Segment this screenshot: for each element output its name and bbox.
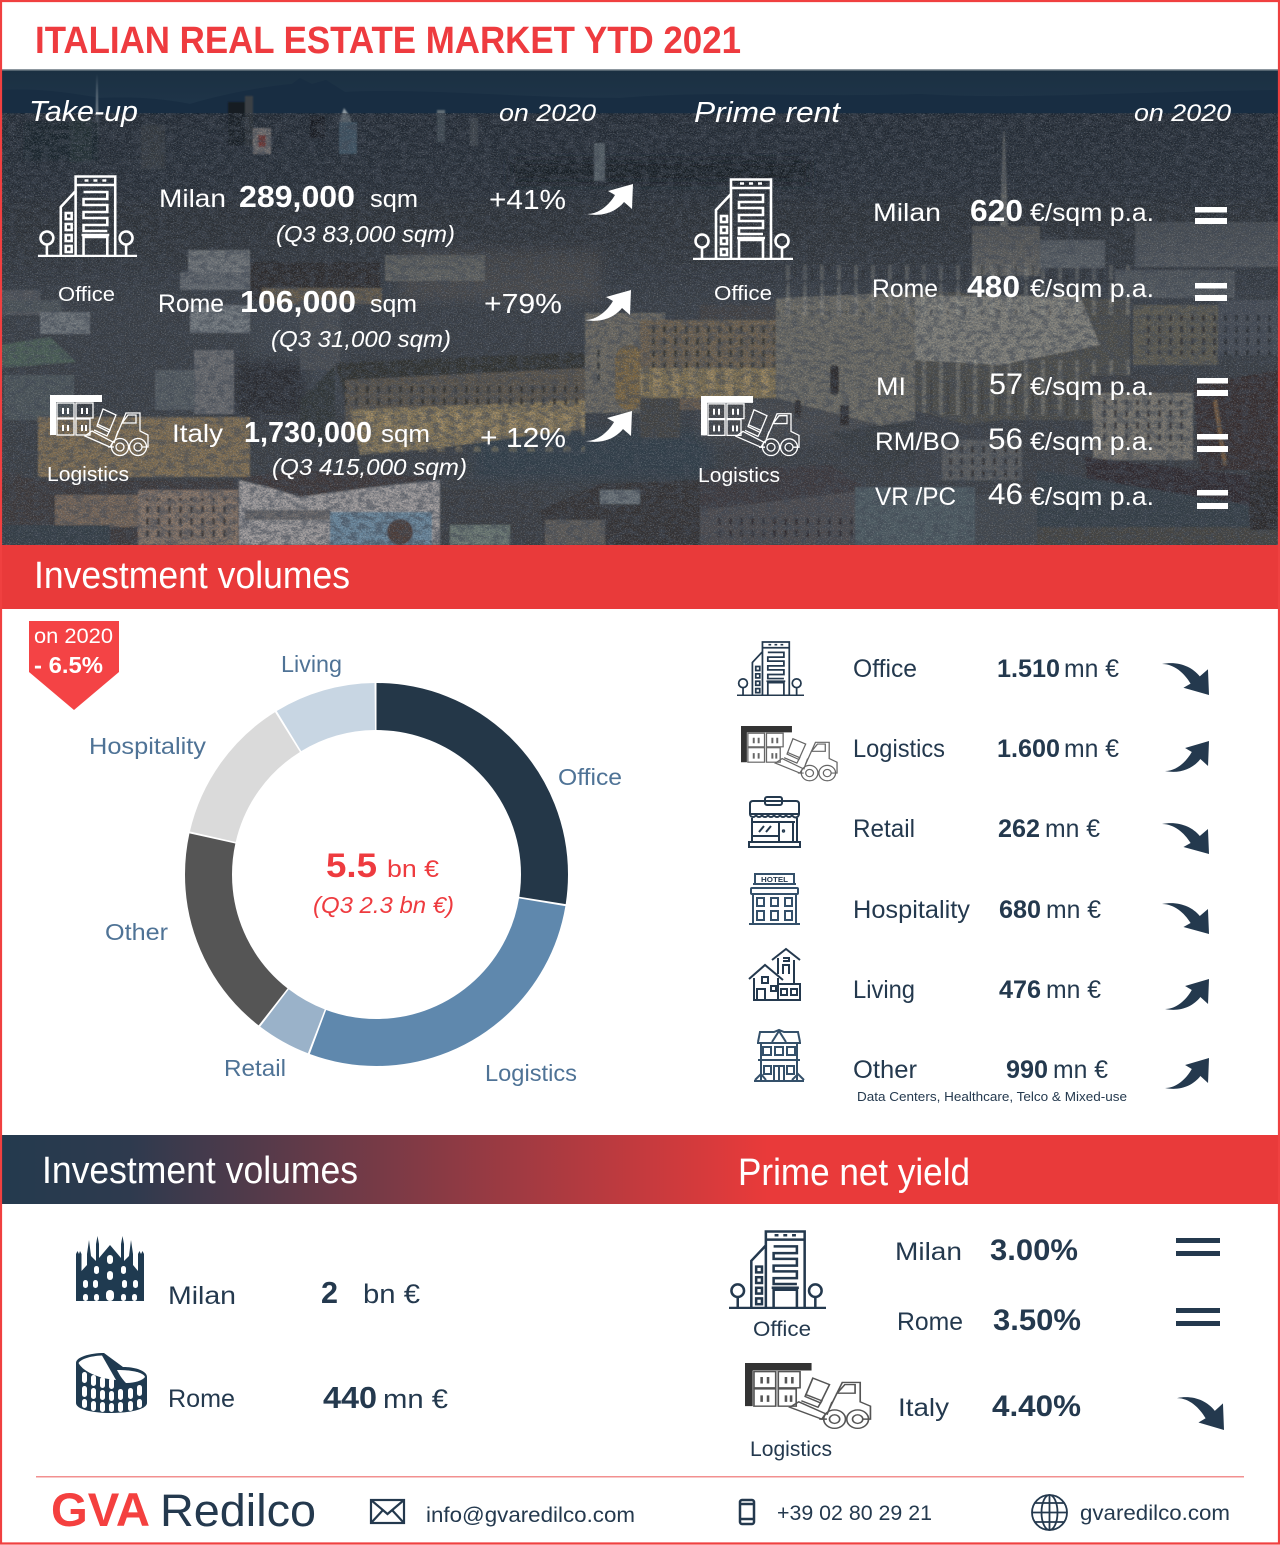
row: Italy take-up: sqm [381, 421, 430, 448]
row: Rome yield: 3.50% [993, 1304, 1081, 1337]
label: Milan volume [168, 1275, 420, 1310]
row: other: 990 [1006, 1056, 1048, 1084]
galleria arch [585, 313, 665, 413]
row: MI rent: €/sqm p.a. [1030, 373, 1154, 401]
row: logistics: mn € [1064, 735, 1119, 763]
row: Milan yield: Milan [895, 1238, 962, 1266]
donut labels: Office [558, 764, 622, 790]
icon: phone [740, 1500, 754, 1524]
label: logistics: Logistics [698, 465, 780, 487]
row: Italy take-up: + 12% [480, 422, 566, 453]
row: other: mn € [1053, 1056, 1108, 1084]
row: office: 1.510 [997, 655, 1060, 683]
donut labels: Other [105, 919, 168, 945]
label: Milan volume: Milan [168, 1282, 236, 1310]
label: on 2020: on 2020 [1134, 100, 1232, 127]
donut labels [89, 651, 622, 1086]
left mid blocks [188, 250, 250, 272]
row: retail [749, 797, 1209, 854]
icon: office [38, 176, 137, 256]
sector list [737, 642, 1209, 1104]
label: Rome volume [168, 1380, 448, 1415]
icon: office [693, 180, 793, 259]
building bottom centre right [540, 480, 700, 545]
row: MI rent: MI [876, 373, 906, 401]
row: hospitality: mn € [1046, 896, 1101, 924]
icon: logistics [701, 396, 799, 456]
donut centre total: 5.5 [326, 847, 377, 885]
cathedral tower and spire [1000, 130, 1008, 226]
label: Rome volume: Rome [168, 1385, 235, 1413]
callout: on 2020 change [29, 621, 119, 710]
row: office: Office [853, 655, 917, 683]
row: hospitality [749, 874, 1209, 934]
row: office: mn € [1064, 655, 1119, 683]
row: MI rent: 57 [989, 368, 1023, 401]
row: Rome yield [897, 1304, 1220, 1337]
label: office: Office [714, 283, 772, 305]
row: Rome rent: €/sqm p.a. [1030, 275, 1154, 303]
row: other: Data Centers, Healthcare, Telco & Mixed-use [857, 1090, 1127, 1104]
section band: investment volumes and prime net yield: Investment volumes [42, 1150, 358, 1192]
heading: prime rent: Prime rent [694, 97, 842, 129]
website: gvaredilco.com [1080, 1502, 1230, 1525]
cathedral [776, 290, 1130, 432]
lower dark roofs [830, 420, 940, 470]
row: Milan yield [895, 1234, 1220, 1267]
donut centre total: (Q3 2.3 bn €) [313, 892, 454, 918]
row: other: Other [853, 1056, 917, 1084]
logo: Redilco [160, 1485, 316, 1536]
row: RM/BO rent: 56 [988, 423, 1023, 456]
callout: on 2020 change: - 6.5% [34, 652, 103, 678]
panel: city photo backdrop [0, 69, 1280, 545]
section heading: investment volumes [2, 545, 1278, 609]
row: logistics [741, 726, 1209, 781]
row: Rome take-up: Rome [158, 290, 224, 318]
callout: on 2020 change: on 2020 [34, 625, 113, 648]
row: VR/PC rent: €/sqm p.a. [1030, 483, 1154, 511]
row: RM/BO rent: RM/BO [875, 428, 960, 456]
row: logistics: Logistics [853, 735, 945, 763]
row: Milan take-up: +41% [489, 184, 566, 215]
ochre building behind logistics [38, 417, 250, 477]
label: Rome volume: 440 [323, 1380, 377, 1415]
title: ITALIAN REAL ESTATE MARKET YTD 2021 [35, 20, 741, 62]
row: Milan take-up: Milan [159, 185, 226, 213]
icon: Colosseum [76, 1353, 147, 1413]
row: other [754, 1030, 1209, 1104]
section band: investment volumes and prime net yield [2, 1135, 1278, 1204]
row: Italy yield [898, 1390, 1224, 1430]
row: office [737, 642, 1209, 695]
row: Milan yield: 3.00% [990, 1234, 1078, 1267]
row: Italy take-up [172, 417, 566, 480]
icon: logistics [50, 395, 148, 456]
palazzo left of cathedral [700, 305, 776, 319]
row: Milan take-up: sqm [370, 186, 418, 213]
panel: prime net yield [729, 1231, 1224, 1461]
arrow: up [586, 411, 632, 442]
row: VR/PC rent: VR /PC [875, 483, 956, 511]
logo [51, 1483, 316, 1536]
row: Italy yield: 4.40% [992, 1390, 1081, 1423]
panel: city volumes [76, 1236, 448, 1415]
row: Italy yield: Italy [898, 1394, 950, 1422]
icon: office [729, 1231, 826, 1308]
arrow: up [585, 290, 631, 321]
email: info@gvaredilco.com [426, 1504, 635, 1527]
row: hospitality: 680 [999, 896, 1041, 924]
label: Milan volume: bn € [363, 1279, 420, 1309]
label: Milan volume: 2 [321, 1275, 338, 1310]
row: Rome rent [872, 269, 1227, 304]
row: Rome yield: Rome [897, 1308, 963, 1336]
row: logistics: 1.600 [997, 735, 1060, 763]
row: Rome take-up: +79% [484, 288, 562, 319]
row: Milan rent [873, 193, 1227, 228]
heading: take-up: Take-up [29, 96, 138, 128]
row: Milan rent: €/sqm p.a. [1030, 199, 1154, 227]
donut labels: Living [281, 651, 342, 677]
panel: take-up [29, 96, 633, 486]
palazzo by the piazza [335, 352, 585, 412]
row: Milan take-up [159, 179, 566, 247]
icon: envelope [371, 1500, 404, 1523]
donut labels: Hospitality [89, 733, 207, 759]
row: VR/PC rent: 46 [988, 478, 1023, 511]
phone number: +39 02 80 29 21 [777, 1502, 932, 1525]
row: Rome take-up: (Q3 31,000 sqm) [271, 326, 451, 352]
panel: prime rent [693, 97, 1232, 511]
row: hospitality: Hospitality [853, 896, 970, 924]
row: living [749, 949, 1209, 1010]
donut labels: Retail [224, 1055, 286, 1081]
icon: globe [1032, 1495, 1067, 1530]
row: Italy take-up: 1,730,000 [244, 417, 372, 449]
row: Italy take-up: (Q3 415,000 sqm) [272, 454, 467, 480]
buildings right of cathedral [1135, 222, 1280, 267]
label: on 2020: on 2020 [499, 100, 597, 127]
row: Milan take-up: 289,000 [239, 179, 355, 214]
distance dimming over the far city [2, 113, 1278, 303]
row: VR/PC rent [875, 478, 1228, 511]
section band: investment volumes and prime net yield: Prime net yield [738, 1152, 970, 1194]
row: RM/BO rent [875, 423, 1228, 456]
footer [51, 1483, 1230, 1536]
row: retail: Retail [853, 815, 915, 843]
row: living: mn € [1046, 976, 1101, 1004]
label: logistics: Logistics [47, 464, 129, 486]
donut centre total [313, 847, 454, 918]
arrow: up [587, 184, 633, 215]
lower left buildings [0, 470, 250, 545]
row: living: 476 [999, 976, 1041, 1004]
row: Rome rent: Rome [872, 275, 938, 303]
row: Milan rent: Milan [873, 199, 941, 227]
donut chart: investment by sector [208, 706, 544, 1042]
donut centre total: bn € [387, 856, 440, 883]
label: logistics: Logistics [750, 1438, 832, 1461]
skyline towers [95, 74, 99, 135]
white building and billboard [239, 480, 440, 545]
row: Rome rent: 480 [967, 269, 1020, 304]
icon: Milan cathedral [76, 1236, 144, 1301]
icon: logistics [745, 1363, 870, 1428]
row: hospitality: HOTEL [761, 875, 788, 884]
row: Milan take-up: (Q3 83,000 sqm) [276, 221, 455, 247]
row: RM/BO rent: €/sqm p.a. [1030, 428, 1154, 456]
pale palace [1093, 393, 1193, 460]
mountains [2, 78, 1278, 114]
city texture [2, 113, 1278, 545]
label: Rome volume: mn € [383, 1384, 448, 1414]
row: Rome take-up: 106,000 [240, 284, 356, 319]
logo: GVA [51, 1483, 150, 1536]
row: living: Living [853, 976, 915, 1004]
donut labels: Logistics [485, 1060, 577, 1086]
label: office: Office [58, 284, 115, 306]
label: office: Office [753, 1318, 811, 1341]
row: retail: mn € [1045, 815, 1100, 843]
row: Rome take-up: sqm [370, 291, 417, 318]
row: retail: 262 [998, 815, 1040, 843]
row: Italy take-up: Italy [172, 420, 224, 448]
row: MI rent [876, 368, 1228, 401]
row: Rome take-up [158, 284, 562, 352]
section heading: investment volumes: Investment volumes [34, 555, 350, 597]
row: Milan rent: 620 [970, 193, 1023, 228]
